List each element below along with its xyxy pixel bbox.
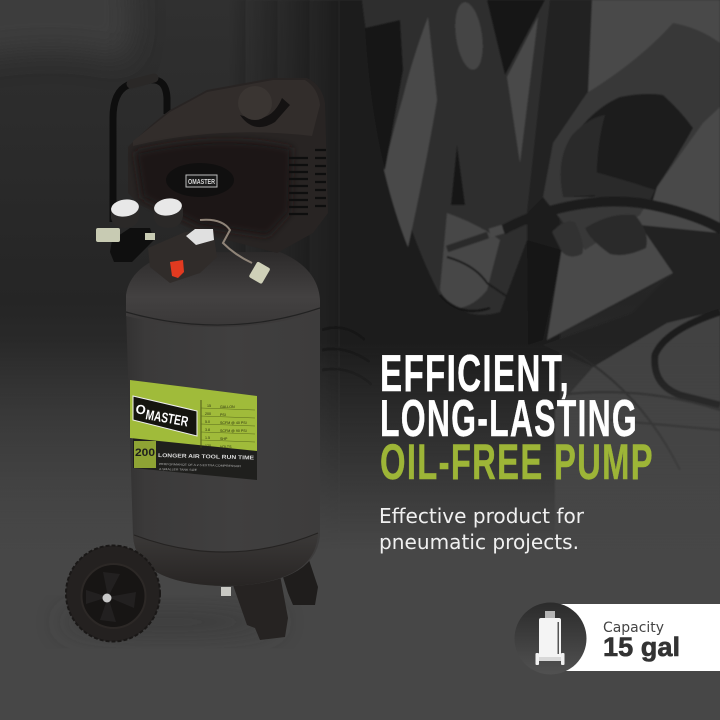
glove silhouette <box>543 23 720 250</box>
dark tyre shading <box>230 0 340 550</box>
spec table: 15 <box>207 404 211 408</box>
dark lower barrel <box>527 240 562 345</box>
tank bottom seam <box>134 533 318 552</box>
spec table: VOLTS <box>220 445 232 449</box>
product label <box>130 380 257 480</box>
tyre tread marks <box>322 328 372 385</box>
floor lower right <box>555 310 720 550</box>
description text <box>379 504 585 554</box>
gauges and pressure switch <box>96 197 271 284</box>
brand logo: MASTER <box>144 406 190 429</box>
capacity badge <box>514 602 720 674</box>
icon disc <box>514 602 586 674</box>
spec table: PSI <box>220 413 226 417</box>
headline line 1: EFFICIENT, <box>380 345 570 403</box>
spec table: 1.5 <box>205 436 210 440</box>
glove fingers <box>560 115 605 197</box>
upper rim hole <box>451 1 487 71</box>
tube <box>200 220 252 263</box>
spec table: GALLON <box>220 405 235 409</box>
spec table: SCFM @ 40 PSI <box>220 421 247 425</box>
handle <box>113 80 167 222</box>
dark spoke windows <box>365 20 403 170</box>
air hose <box>503 202 720 230</box>
tyre valve stem <box>447 257 527 310</box>
gauge right <box>154 208 183 228</box>
coiled hose on floor <box>655 312 720 405</box>
floor cracks <box>560 350 720 470</box>
spec table: SCFM @ 90 PSI <box>220 429 247 433</box>
pressure switch box <box>148 230 217 283</box>
brand logo: O <box>134 401 147 418</box>
brand logo <box>133 396 197 436</box>
brand plate <box>186 175 217 187</box>
tank bottom cap <box>133 533 318 586</box>
label caption: LONGER AIR TOOL RUN TIME <box>158 453 254 462</box>
glove palm <box>561 94 693 200</box>
end cap recess <box>240 98 290 127</box>
background fade <box>0 340 720 550</box>
spec table: 5.0 <box>205 420 210 424</box>
product label: A SMALLER TANK SIZE <box>159 467 197 472</box>
label green area <box>130 380 257 451</box>
description text: pneumatic projects. <box>379 530 579 554</box>
description text: Effective product for <box>379 504 585 528</box>
shroud end cap <box>238 86 272 120</box>
spec table: 200 <box>205 412 211 416</box>
motor shroud <box>128 78 328 253</box>
rim light gap left <box>384 17 437 247</box>
rim light gap right <box>507 17 538 163</box>
label black band <box>133 434 257 480</box>
big wheel <box>66 546 160 642</box>
tank body <box>126 310 320 586</box>
vent slats <box>289 150 326 214</box>
rim light gap lower <box>440 213 500 308</box>
side oval badge <box>166 163 234 197</box>
brass fitting <box>249 261 271 284</box>
spec table: 3.8 <box>205 428 210 432</box>
tyre sidewall <box>340 0 560 550</box>
shroud top highlight <box>133 80 320 146</box>
wheel rim <box>362 0 552 315</box>
headline <box>380 345 654 490</box>
hose nozzle <box>490 229 503 233</box>
white ribbon <box>560 604 720 671</box>
left blurred car shape <box>0 0 132 60</box>
spec table: 120 <box>205 444 211 448</box>
shadow across floor <box>543 225 720 367</box>
quick coupler <box>96 228 120 242</box>
front foot <box>233 575 288 640</box>
regulator <box>110 228 154 262</box>
capacity label: Capacity <box>603 620 664 636</box>
red switch <box>170 260 184 278</box>
spec table: SHP <box>220 437 228 441</box>
shroud dark front panel <box>135 141 292 236</box>
gauge left <box>111 208 139 228</box>
label fine print: PERFORMANCE OF A 2.5 EXTRA COMPRESSOR <box>159 462 242 468</box>
capacity value: 15 gal <box>603 632 680 662</box>
dome seam <box>126 308 320 325</box>
motor shroud: OMASTER <box>188 179 215 186</box>
product: air compressor <box>60 78 328 642</box>
floor shadow <box>60 610 280 634</box>
handle grip <box>131 78 154 84</box>
spec table <box>201 400 255 449</box>
background photo: tyre being inflated by gloved hand <box>0 0 720 550</box>
icon: tank on wheels <box>536 611 564 665</box>
rear foot <box>283 557 318 605</box>
tank dome <box>126 252 320 327</box>
rim edge line <box>440 295 490 311</box>
200 badge: 200 <box>135 447 155 459</box>
floor light <box>547 223 673 340</box>
right wall light <box>588 0 720 240</box>
rim barrel <box>527 0 592 213</box>
drain valve <box>221 587 231 596</box>
